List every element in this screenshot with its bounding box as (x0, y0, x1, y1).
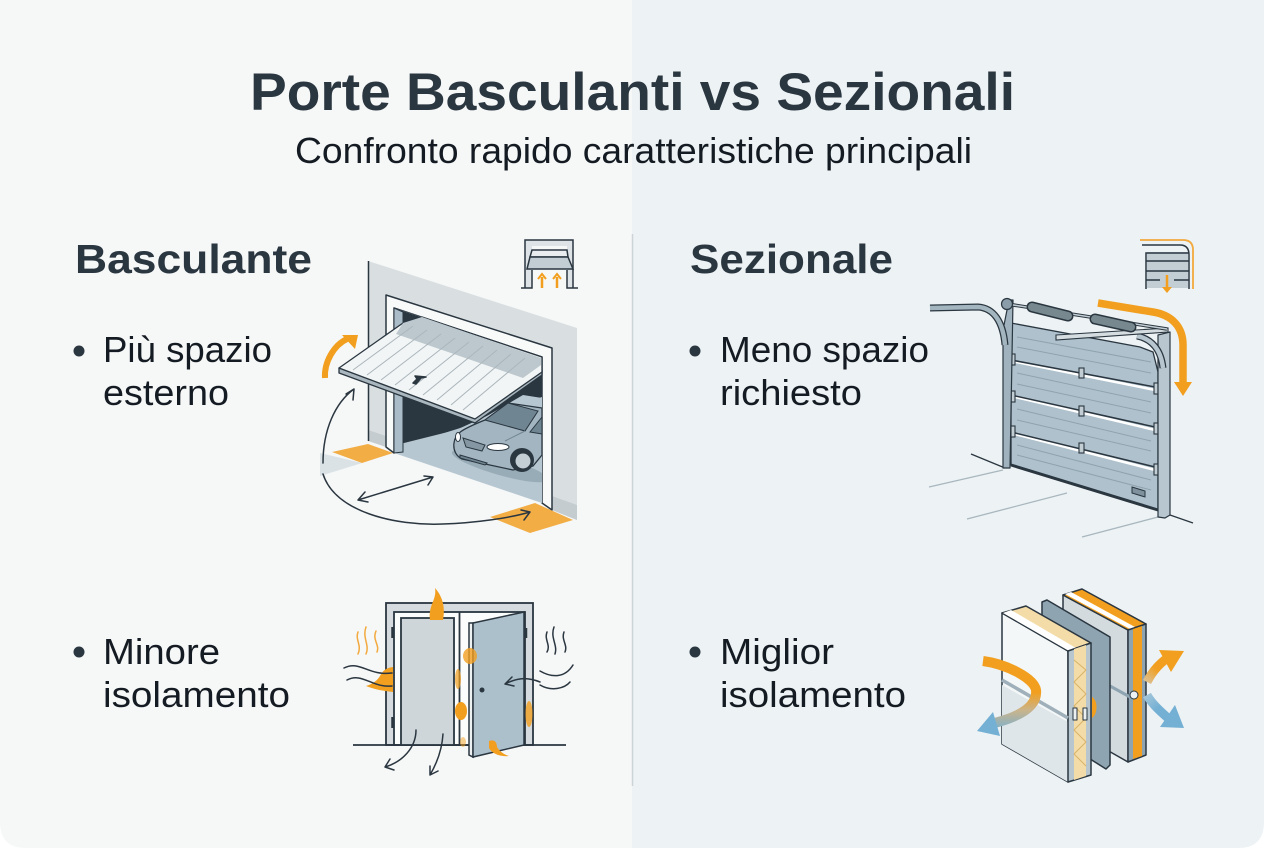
draught arrows (385, 677, 540, 775)
text block: più spazio esterno: esterno (103, 372, 229, 413)
text block: miglior isolamento (690, 631, 906, 715)
front panel (1002, 606, 1091, 782)
wall (368, 261, 577, 520)
text block: più spazio esterno: Più spazio (103, 329, 272, 370)
arrow: exit blue (1147, 695, 1184, 728)
illustration: up-and-over garage door (320, 261, 577, 533)
heading: basculante: Basculante (75, 236, 312, 282)
panel: sezionale (690, 236, 1193, 782)
section seams (1011, 360, 1155, 470)
text block: più spazio esterno (74, 329, 272, 413)
arrow: heat reflected through panel (977, 661, 1036, 736)
text block: miglior isolamento: isolamento (720, 674, 906, 715)
left door leaf (401, 618, 454, 745)
text block: miglior isolamento: Miglior (720, 631, 834, 672)
illustration: poorly insulated door (344, 588, 573, 775)
text block: meno spazio richiesto: Meno spazio (720, 329, 929, 370)
arrow: orange opening (325, 335, 358, 378)
arrow: orange overhead path (1098, 303, 1192, 396)
text block: meno spazio richiesto: richiesto (720, 372, 862, 413)
text block: minore isolamento: Minore (103, 631, 220, 672)
ribs (1017, 337, 1151, 490)
hinges (392, 627, 526, 728)
icon: sectional door mini (1140, 240, 1193, 293)
illustration: sectional garage door (929, 298, 1193, 537)
back panel (1063, 589, 1146, 762)
handle (1132, 487, 1145, 497)
floor lines (929, 454, 1193, 537)
frame (386, 603, 533, 745)
heading: sezionale: Sezionale (690, 236, 893, 282)
orange floor markers (332, 444, 393, 463)
icon: up-and-over door mini (521, 240, 578, 288)
text block: minore isolamento: isolamento (103, 674, 290, 715)
floor glow (320, 453, 362, 476)
arrow: exit orange (1147, 650, 1184, 682)
heat leaks (366, 588, 532, 756)
top arm (1056, 328, 1168, 340)
text block: meno spazio richiesto (690, 329, 929, 413)
illustration: insulated panels (977, 589, 1184, 782)
car (452, 402, 542, 482)
door panels (1011, 323, 1158, 510)
heat squiggles (344, 627, 573, 689)
posts and rails (930, 300, 1170, 518)
title: Porte Basculanti vs Sezionali (250, 63, 1015, 122)
opening (395, 309, 542, 503)
hinges (1011, 354, 1158, 475)
panel: basculante (74, 236, 578, 775)
tilted door panel (339, 317, 542, 423)
middle panel (1042, 600, 1110, 769)
arrow: swing arc (323, 389, 530, 524)
right door leaf (469, 612, 524, 757)
text block: minore isolamento (74, 631, 290, 715)
torsion shaft and springs (1002, 298, 1167, 329)
white frame (386, 295, 552, 510)
subtitle: Confronto rapido caratteristiche principali (295, 130, 972, 171)
